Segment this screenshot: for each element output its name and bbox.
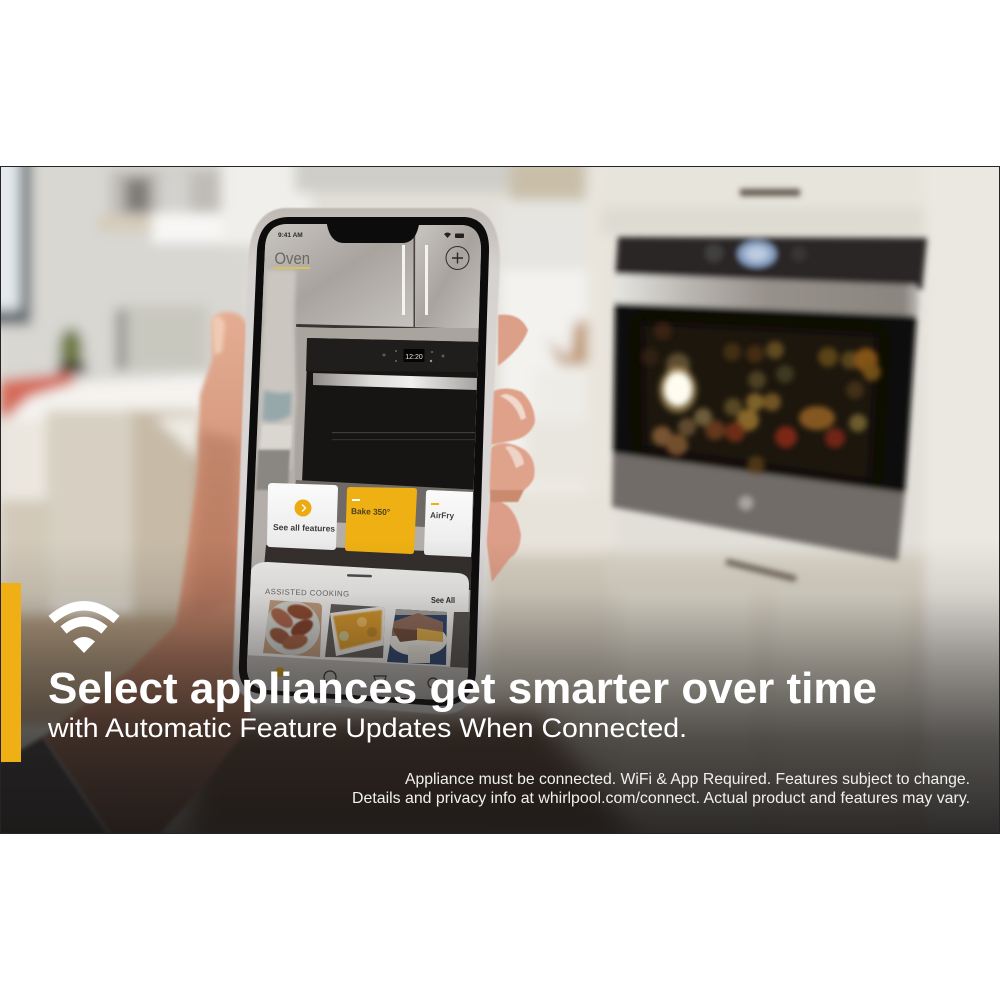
assisted cooking sheet bbox=[246, 562, 470, 700]
phone case bbox=[233, 208, 500, 714]
feature card: airfry bbox=[424, 490, 473, 557]
finger 4 bbox=[486, 500, 521, 582]
feature card: see all features bbox=[267, 483, 338, 550]
kitchen background centre bbox=[290, 167, 607, 722]
icon: wifi bbox=[52, 606, 116, 653]
cabinet handles bbox=[725, 189, 800, 582]
in-app oven: 12:20 bbox=[405, 354, 423, 361]
sleeve bbox=[0, 737, 115, 845]
add button bbox=[446, 246, 469, 270]
photo frame bbox=[0, 166, 1000, 834]
food photo: cake bbox=[387, 609, 447, 665]
oven interior lights bbox=[641, 322, 881, 474]
feature card: see all features: See all features bbox=[273, 522, 335, 534]
finger 1 bbox=[498, 315, 528, 366]
dark gradient overlay bbox=[0, 540, 1000, 833]
oven lower panel bbox=[612, 453, 905, 561]
phone notch bbox=[326, 224, 419, 243]
oven door window bbox=[613, 300, 917, 493]
screen title: oven: Oven bbox=[274, 249, 310, 268]
feature card: bake 350: Bake 350° bbox=[351, 506, 391, 517]
assisted cooking sheet: See All bbox=[431, 596, 455, 605]
finger 3 bbox=[487, 443, 535, 495]
status bar icons bbox=[444, 232, 464, 238]
in-app oven bbox=[262, 338, 482, 590]
upper cabinets bbox=[262, 222, 482, 332]
disclaimer text: Details and privacy info at whirlpool.com/connect. Actual product and features may vary. bbox=[352, 790, 970, 807]
kitchen background left bbox=[0, 150, 312, 725]
subheading: with Automatic Feature Updates When Connected. bbox=[47, 713, 687, 743]
status bar time: 9:41 AM bbox=[278, 232, 303, 239]
wall oven bbox=[612, 237, 927, 561]
disclaimer text bbox=[352, 771, 970, 807]
hand: palm and thumb bbox=[43, 312, 250, 845]
wallpaper and wall strip bbox=[256, 270, 485, 508]
oven handle bbox=[613, 274, 919, 316]
table under the phone bbox=[190, 715, 640, 845]
finger 2 bbox=[490, 388, 535, 445]
hand: fingers bbox=[486, 315, 535, 582]
screen title: oven bbox=[274, 252, 310, 269]
phone screen bbox=[246, 224, 481, 700]
feature card: bake 350 bbox=[345, 487, 417, 554]
food photo: casserole bbox=[325, 604, 386, 658]
photo panel: blurred kitchen scene bbox=[0, 150, 1000, 850]
phone bbox=[233, 208, 500, 720]
tab bar bbox=[247, 655, 468, 700]
oven glow highlight bbox=[659, 367, 697, 413]
assisted cooking sheet: ASSISTED COOKING bbox=[265, 587, 350, 599]
food photo: pastry plate bbox=[263, 600, 322, 657]
oven control panel bbox=[615, 237, 927, 290]
food photo: partial tray bbox=[450, 612, 470, 668]
disclaimer text: Appliance must be connected. WiFi & App Required. Features subject to change. bbox=[405, 771, 970, 788]
feature card: airfry: AirFry bbox=[430, 510, 454, 521]
yellow accent bar bbox=[1, 583, 21, 762]
phone bezel bbox=[239, 217, 489, 706]
headline: Select appliances get smarter over time bbox=[48, 664, 877, 713]
kitchen background right cabinets bbox=[604, 167, 999, 688]
